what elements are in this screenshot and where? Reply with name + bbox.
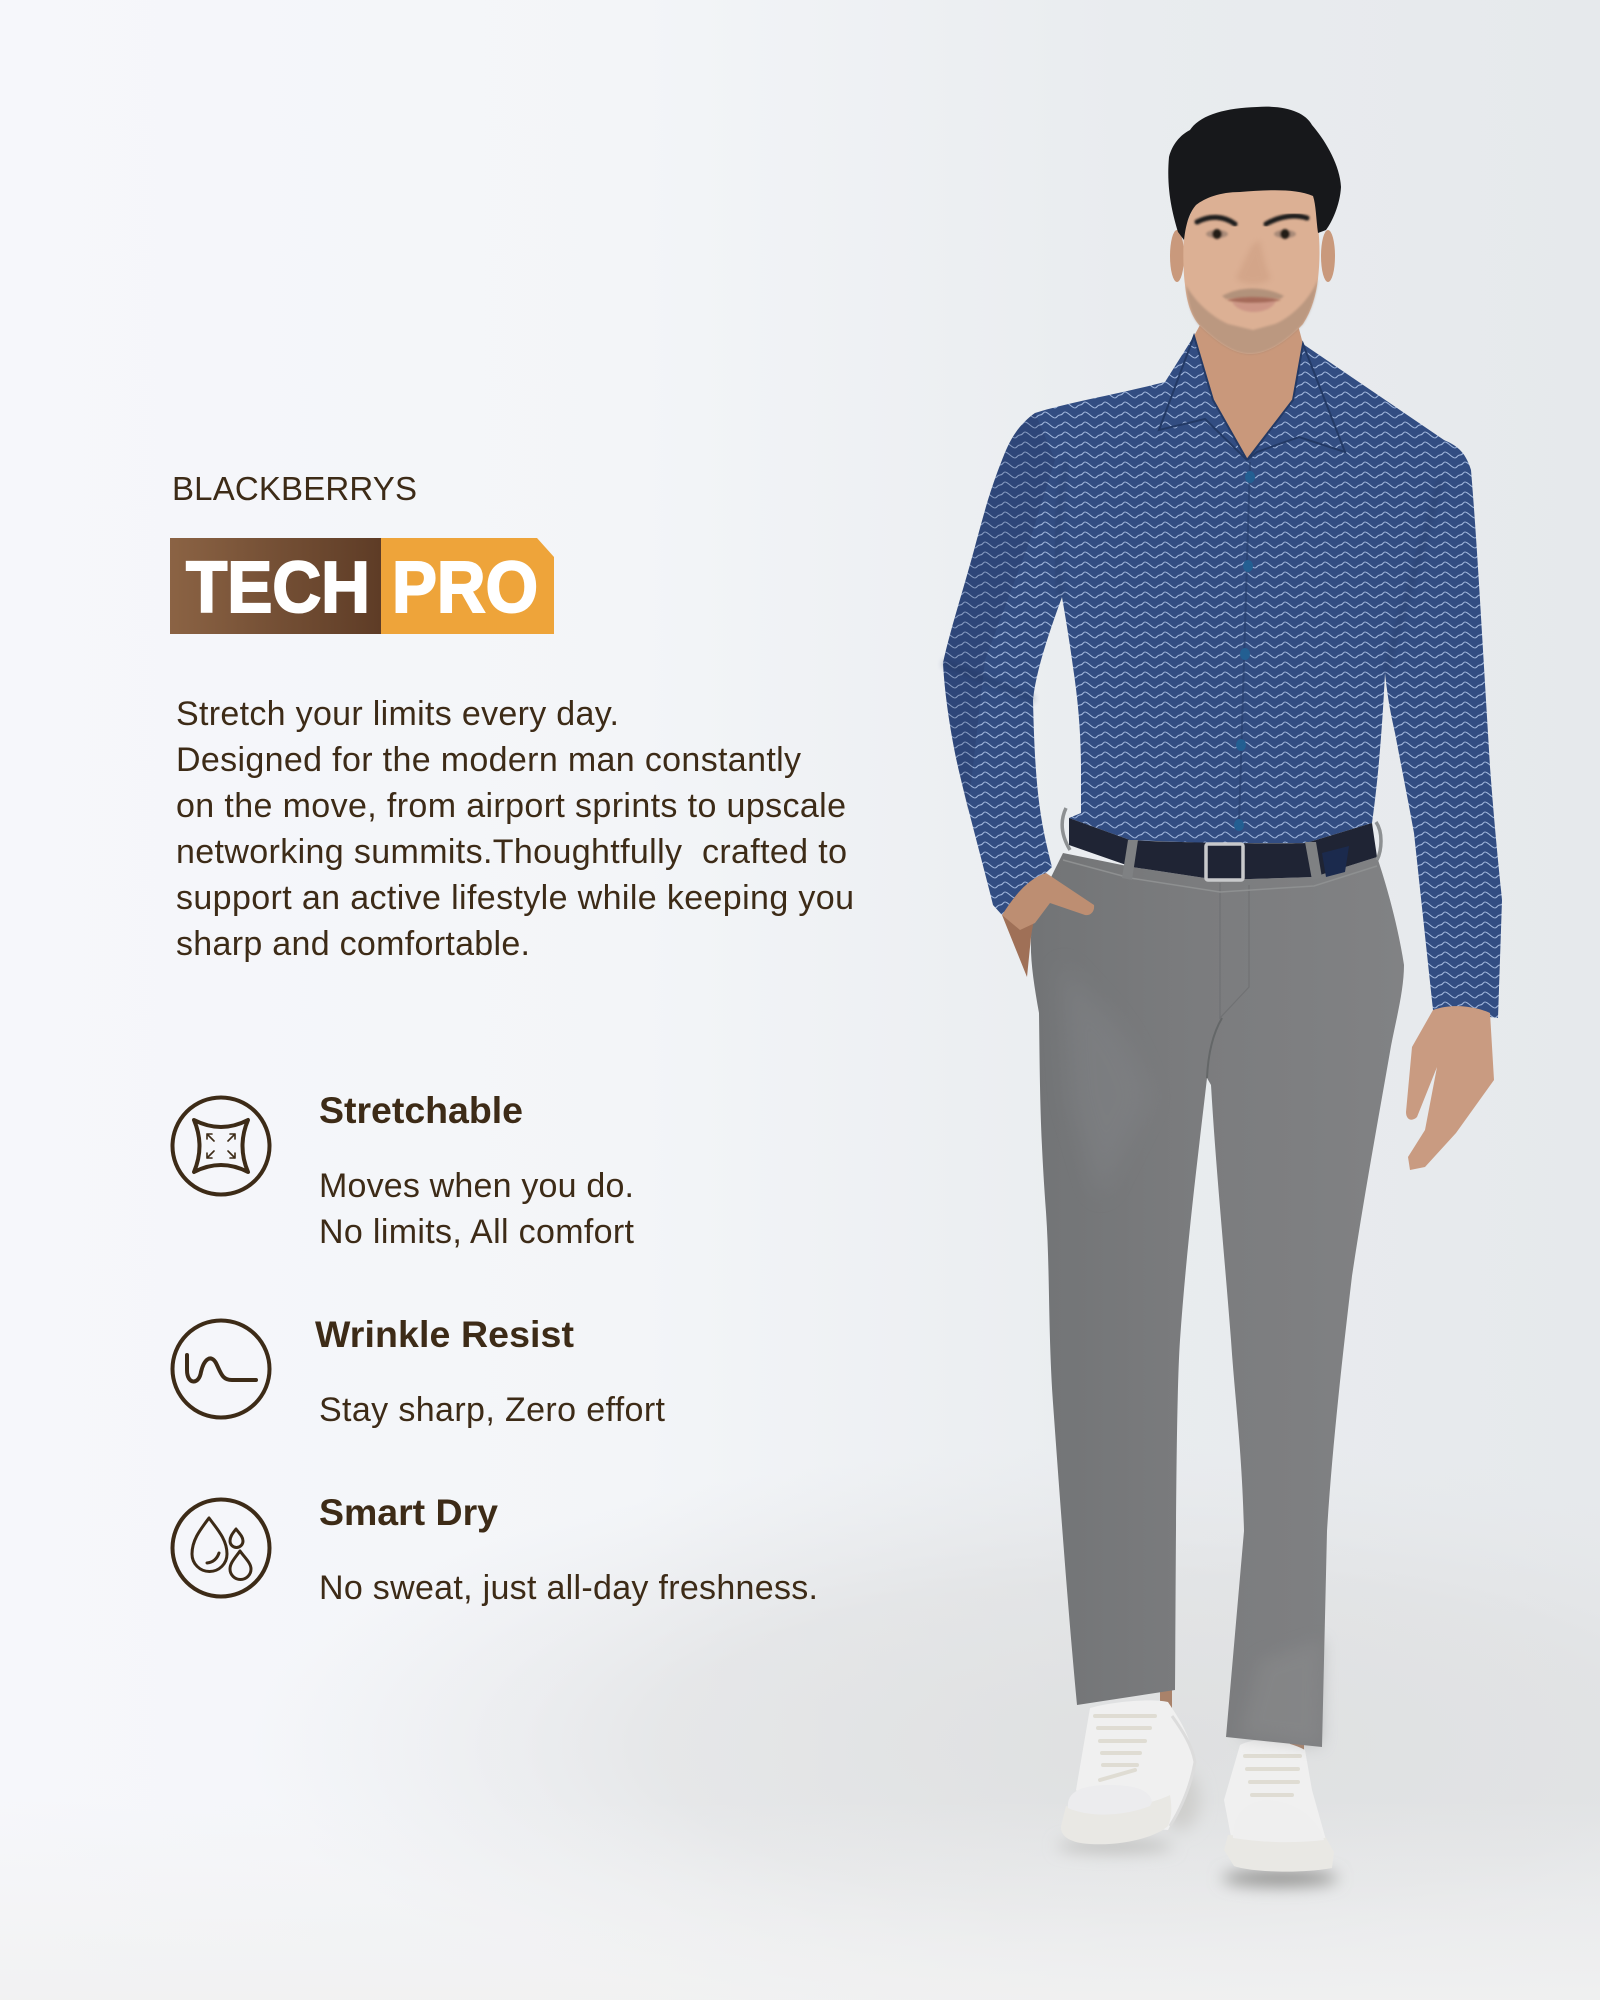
logo: Tech Pro	[170, 538, 554, 634]
buttons	[1234, 471, 1255, 831]
brand name: BLACKBERRYS	[172, 470, 417, 507]
eyebrows	[1197, 216, 1307, 224]
description	[319, 1167, 635, 1251]
right hand	[1406, 1006, 1494, 1170]
intro paragraph: on the move, from airport sprints to upscale	[176, 787, 846, 825]
trousers	[1031, 853, 1404, 1747]
model photo illustration	[943, 107, 1502, 1886]
heading: Stretchable	[319, 1089, 523, 1131]
eyes	[1206, 229, 1296, 239]
description: Moves when you do.	[319, 1167, 634, 1205]
stubble	[1186, 279, 1318, 354]
left hand in pocket	[998, 866, 1050, 977]
feature: smart dry	[172, 1491, 818, 1607]
collar	[1159, 336, 1247, 460]
ears	[1170, 230, 1184, 282]
heading: Smart Dry	[319, 1491, 498, 1533]
logo: Tech Pro: PRO	[392, 548, 538, 628]
description: Stay sharp, Zero effort	[319, 1391, 666, 1429]
icon: wrinkle line	[172, 1320, 270, 1418]
intro paragraph	[176, 695, 854, 963]
description: No limits, All comfort	[319, 1213, 635, 1251]
intro paragraph: networking summits.Thoughtfully crafted to	[176, 833, 847, 871]
intro paragraph: Stretch your limits every day.	[176, 695, 619, 733]
left shoe	[1061, 1688, 1195, 1844]
lips	[1227, 297, 1281, 312]
logo: Tech Pro: TECH	[186, 548, 370, 628]
icon: water drops	[172, 1500, 270, 1596]
intro paragraph: support an active lifestyle while keeping you	[176, 879, 854, 917]
face	[1183, 183, 1320, 354]
feature: wrinkle resist	[172, 1313, 666, 1429]
left thumb	[1002, 873, 1094, 930]
right shoe	[1224, 1740, 1334, 1872]
description: No sweat, just all-day freshness.	[319, 1569, 818, 1607]
floor shadows	[1057, 1770, 1338, 1886]
head	[1168, 107, 1341, 354]
intro paragraph: Designed for the modern man constantly	[176, 741, 801, 779]
nose	[1236, 240, 1271, 284]
heading: Wrinkle Resist	[315, 1313, 574, 1355]
feature: stretchable	[172, 1089, 635, 1251]
neck	[1194, 325, 1303, 466]
belt	[1062, 808, 1381, 880]
icon: stretch fabric	[172, 1098, 270, 1194]
hair	[1168, 107, 1341, 240]
shirt	[943, 336, 1502, 1018]
intro paragraph: sharp and comfortable.	[176, 925, 530, 963]
